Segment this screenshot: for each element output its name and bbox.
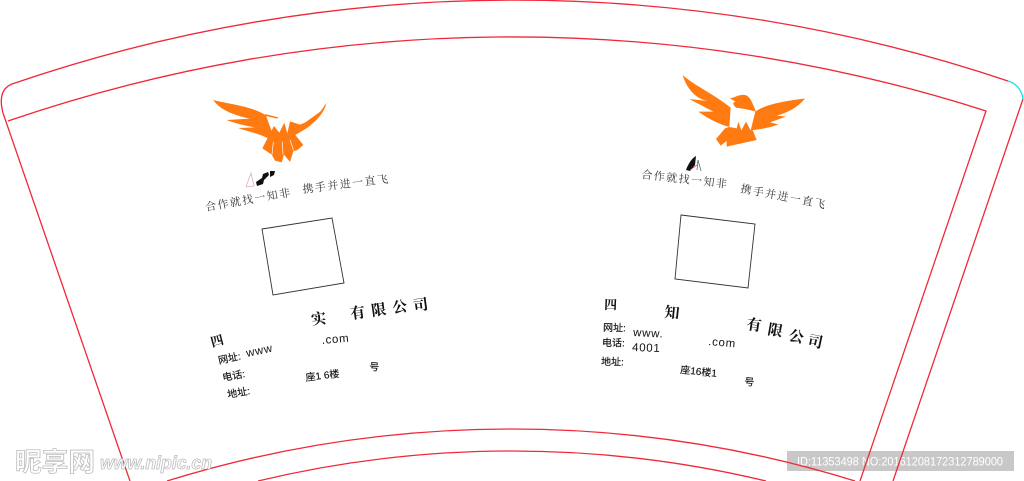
- left company name: 公: [391, 299, 408, 317]
- right contact details: [601, 321, 755, 389]
- left contact details: 地址:: [226, 384, 251, 401]
- right contact details: 电话:: [602, 336, 625, 349]
- left slogan: [204, 171, 390, 214]
- right company name: 限: [766, 321, 784, 341]
- right slogan: 携手并进一直飞: [739, 181, 828, 212]
- left contact details: [217, 333, 380, 401]
- right contact details: .com: [708, 336, 736, 350]
- left contact details: 电话:: [221, 367, 246, 384]
- right company name: [604, 297, 824, 352]
- watermark bar: image ID: ID:11353498 NO:20161208172312789000: [797, 454, 1003, 468]
- left slogan: 合作就找一知非: [204, 185, 293, 214]
- right contact details: www.: [632, 327, 664, 341]
- cyan corner of die-line: [1008, 81, 1023, 99]
- left slogan: 携手并进一直飞: [302, 171, 390, 196]
- right contact details: 号: [744, 376, 755, 389]
- left eagle logo: [213, 100, 327, 162]
- left company name: [209, 296, 429, 350]
- left small black mark: [246, 171, 275, 187]
- left company name: 有: [349, 303, 366, 323]
- right company name: 公: [787, 328, 805, 347]
- right QR placeholder: [675, 215, 755, 288]
- left company name: 实: [310, 310, 328, 329]
- right contact details: 4001: [632, 342, 661, 355]
- right company name: 四: [604, 297, 617, 312]
- left QR placeholder: [262, 218, 344, 295]
- right contact details: 网址:: [603, 321, 626, 334]
- right slogan: 合作就找一知非: [641, 167, 729, 191]
- left contact details: .com: [321, 333, 350, 347]
- nipic watermark: 昵享网: [15, 447, 95, 477]
- right company name: 司: [806, 332, 824, 352]
- right contact details: 地址:: [601, 355, 624, 368]
- left contact details: 号: [369, 361, 380, 374]
- left company name: 四: [209, 332, 225, 350]
- right company name: 有: [745, 315, 763, 335]
- right contact details: 座16楼1: [680, 363, 718, 380]
- left contact details: 座1 6楼: [305, 367, 340, 384]
- right small black feather mark: [686, 156, 701, 171]
- right eagle logo: [683, 75, 805, 147]
- nipic watermark: www.nipic.cn: [100, 453, 212, 473]
- left contact details: www: [244, 343, 274, 360]
- left company name: 限: [370, 301, 387, 320]
- watermark bar: image ID: [787, 451, 1014, 471]
- right slogan: [641, 167, 828, 212]
- left contact details: 网址:: [217, 349, 242, 367]
- nipic watermark: [15, 447, 212, 477]
- left company name: 司: [412, 296, 429, 315]
- right company name: 知: [664, 304, 680, 323]
